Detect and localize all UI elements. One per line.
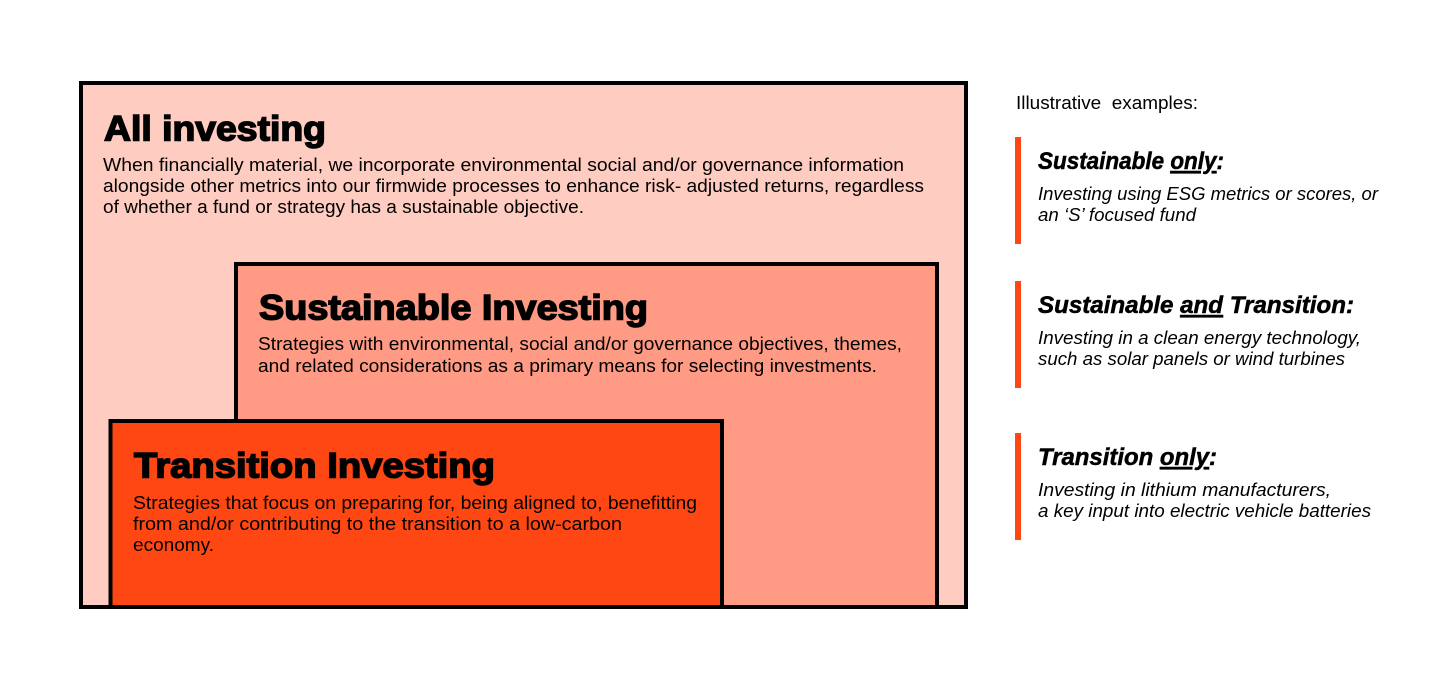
heading: sustainable investing: Sustainable Investing [259,288,648,328]
example heading: Sustainable and Transition: [1038,292,1354,319]
accent bar [1015,281,1021,388]
accent bar [1015,137,1021,244]
text: sustainable investing description [258,333,902,376]
example description: a key input into electric vehicle batteries [1038,501,1371,521]
example description [1038,328,1361,369]
text: transition investing description [133,492,697,555]
example description: Investing in a clean energy technology, [1038,328,1361,348]
text: all investing description: of whether a fund or strategy has a sustainable objective. [103,196,584,217]
text: transition investing description: Strategies that focus on preparing for, being aligned to, benefitting [133,492,697,513]
heading: transition investing: Transition Investing [134,446,495,486]
text: all investing description [103,154,924,217]
example heading: Sustainable only: [1038,148,1224,175]
example: sustainable only [1015,137,1379,244]
example description: such as solar panels or wind turbines [1038,349,1345,369]
panel: sustainable investing [236,264,937,607]
accent bar [1015,433,1021,540]
heading: illustrative examples: Illustrative examples: [1016,93,1198,113]
example description: Investing using ESG metrics or scores, or [1038,184,1379,204]
text: transition investing description: economy. [133,534,214,555]
example description [1038,184,1379,225]
example description: an ‘S’ focused fund [1038,205,1197,225]
panel: all investing [81,83,966,607]
example description: Investing in lithium manufacturers, [1038,480,1331,500]
example: sustainable and transition [1015,281,1361,388]
heading: all investing: All investing [104,110,326,148]
text: transition investing description: from and/or contributing to the transition to a low-carbon [133,513,622,534]
text: all investing description: When financially material, we incorporate environmental social and/or governance information [103,154,904,175]
text: sustainable investing description: and related considerations as a primary means for selecting investments. [258,355,877,376]
example: transition only [1015,433,1371,540]
text: all investing description: alongside other metrics into our firmwide processes to enhance risk- adjusted returns, regardless [103,175,924,196]
example heading: Transition only: [1038,444,1217,471]
example description [1038,480,1371,521]
panel: transition investing [110,421,722,607]
text: sustainable investing description: Strategies with environmental, social and/or governance objectives, themes, [258,333,902,354]
